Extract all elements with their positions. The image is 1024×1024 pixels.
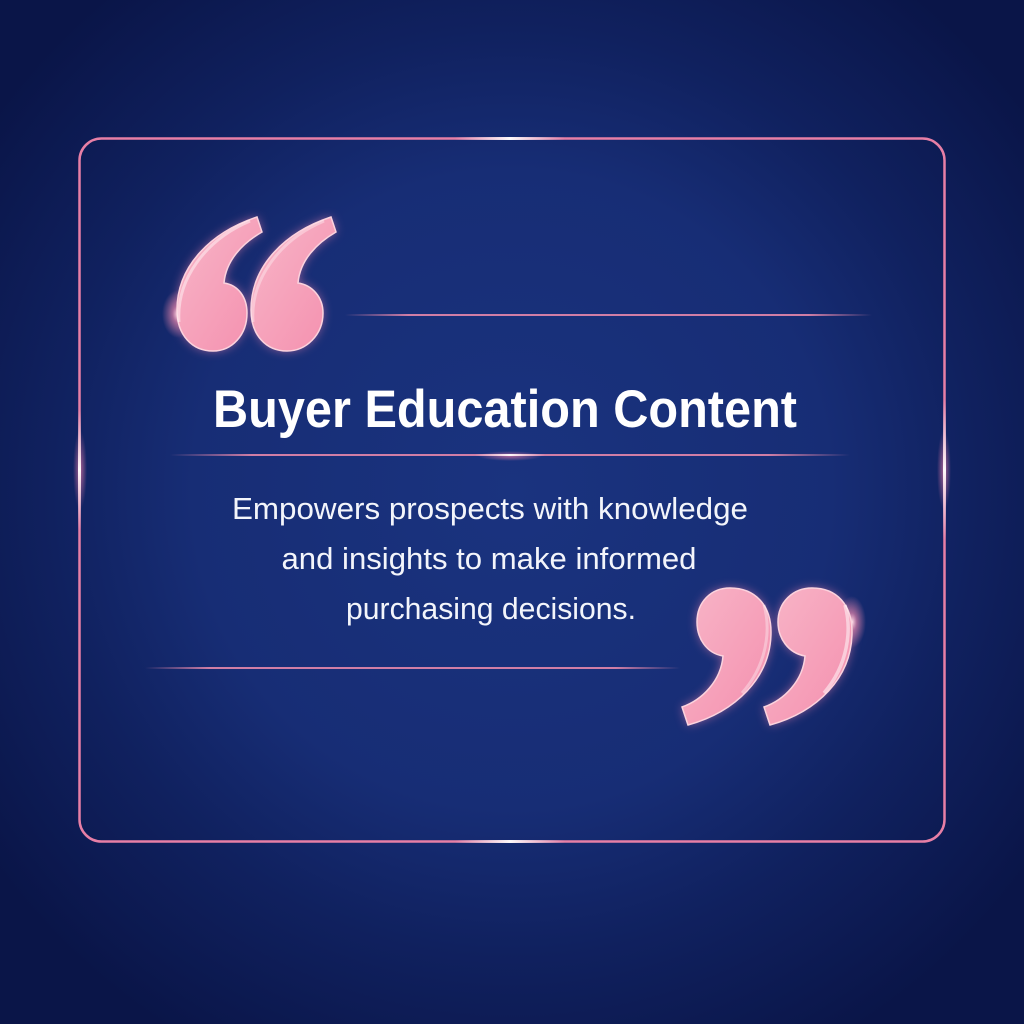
icon: opening quotation mark <box>162 217 336 351</box>
text block: description: Empowers prospects with knowledge <box>232 491 748 526</box>
text block: description: and insights to make informed <box>282 541 696 576</box>
divider: title rule <box>170 451 850 461</box>
title: Buyer Education Content <box>213 380 797 439</box>
panel: quote frame <box>73 137 951 843</box>
text block: description <box>232 491 748 626</box>
divider: top rule <box>345 314 872 316</box>
divider: bottom rule <box>145 667 680 669</box>
text block: description: purchasing decisions. <box>346 591 636 626</box>
icon: closing quotation mark <box>682 588 866 725</box>
